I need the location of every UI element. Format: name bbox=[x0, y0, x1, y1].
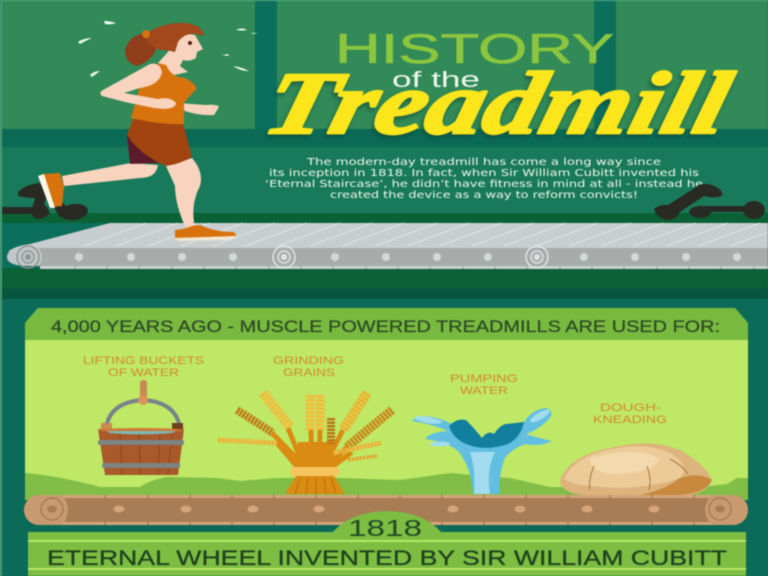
icon: wheat sheaf bbox=[218, 393, 392, 494]
label: grinding grains bbox=[273, 355, 344, 379]
head and neck bbox=[158, 34, 203, 76]
label: pumping water: WATER bbox=[460, 385, 508, 397]
label: dough-kneading: DOUGH- bbox=[600, 402, 661, 414]
front shoe bbox=[175, 225, 236, 238]
shorts bbox=[127, 119, 192, 166]
year: 1818 bbox=[348, 515, 422, 541]
conveyor belt bbox=[24, 495, 748, 532]
title: of the: of the bbox=[392, 67, 480, 92]
label: pumping water: PUMPING bbox=[450, 373, 518, 385]
top bbox=[131, 63, 196, 124]
back arm skin bbox=[178, 103, 219, 115]
label: dough-kneading bbox=[593, 402, 667, 426]
panel: muscle powered treadmills bbox=[25, 308, 748, 500]
label: grinding grains: GRINDING bbox=[273, 355, 344, 367]
sweat drops bbox=[78, 21, 258, 77]
panel header bbox=[25, 308, 748, 340]
label: dough-kneading: KNEADING bbox=[593, 414, 667, 426]
panel: 1818 eternal wheel band bbox=[28, 511, 746, 576]
intro text block: ‘Eternal Staircase’, he didn’t have fitness in mind at all - instead he bbox=[265, 179, 703, 190]
year tab bbox=[333, 511, 441, 532]
icon: dough bbox=[560, 443, 712, 495]
ponytail bbox=[125, 33, 156, 66]
band heading: ETERNAL WHEEL INVENTED BY SIR WILLIAM CUBITT bbox=[47, 546, 727, 570]
icon: dumbbells right bbox=[654, 184, 765, 220]
front leg bbox=[166, 158, 201, 231]
title: History: HISTORY bbox=[335, 25, 614, 72]
heading: 4,000 YEARS AGO - MUSCLE POWERED TREADMILLS ARE USED FOR: bbox=[51, 317, 720, 336]
label: lifting buckets of water: OF WATER bbox=[108, 367, 179, 379]
intro text block: The modern-day treadmill has come a long way since bbox=[306, 157, 661, 168]
label: lifting buckets of water bbox=[83, 355, 204, 379]
rear shoe bbox=[43, 173, 64, 207]
icon: water fountain bbox=[412, 407, 552, 494]
label: lifting buckets of water: LIFTING BUCKETS bbox=[83, 355, 204, 367]
intro text block: its inception in 1818. In fact, when Sir William Cubitt invented his bbox=[269, 168, 699, 179]
intro text block: created the device as a way to reform convicts! bbox=[330, 190, 638, 201]
front arm bbox=[100, 64, 176, 109]
icon: wooden bucket bbox=[98, 380, 184, 475]
rear shorts bbox=[127, 135, 160, 164]
intro text block bbox=[265, 157, 703, 201]
treadmill belt bbox=[7, 223, 768, 269]
title: Treadmill script: Treadmill bbox=[255, 55, 741, 153]
label: pumping water bbox=[450, 373, 518, 397]
hair bbox=[144, 23, 204, 52]
back leg bbox=[62, 163, 158, 186]
icon: running woman bbox=[38, 21, 258, 241]
icon: dumbbells left bbox=[2, 183, 89, 222]
label: grinding grains: GRAINS bbox=[283, 367, 335, 379]
green hills bbox=[25, 473, 748, 500]
